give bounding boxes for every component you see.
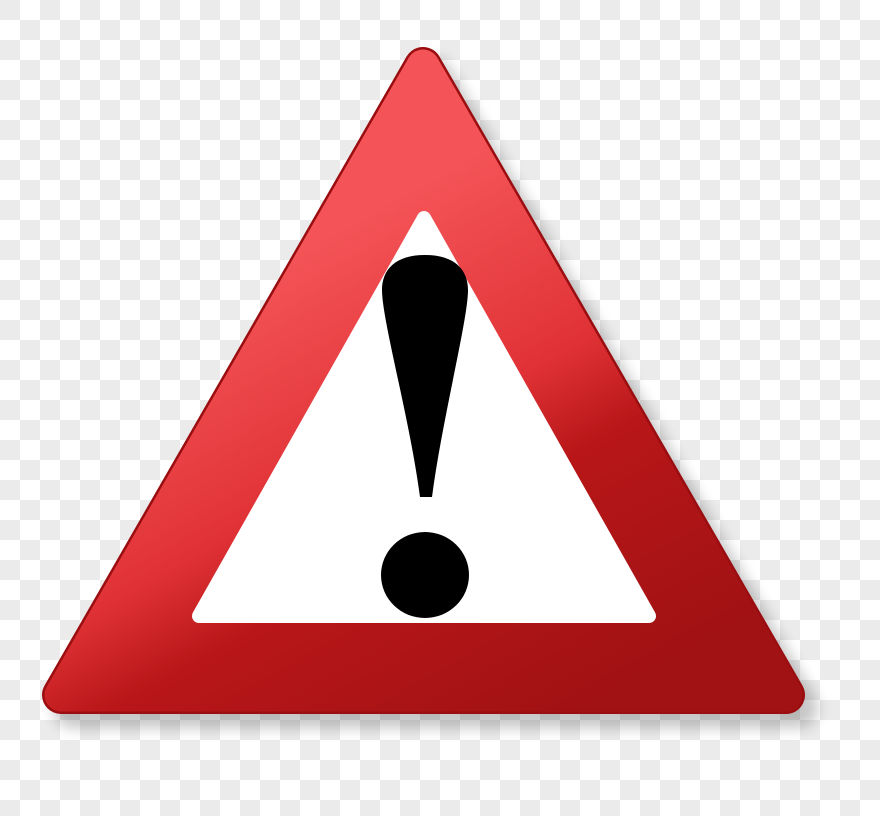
inner white triangle — [199, 218, 649, 616]
exclamation mark — [381, 255, 469, 618]
